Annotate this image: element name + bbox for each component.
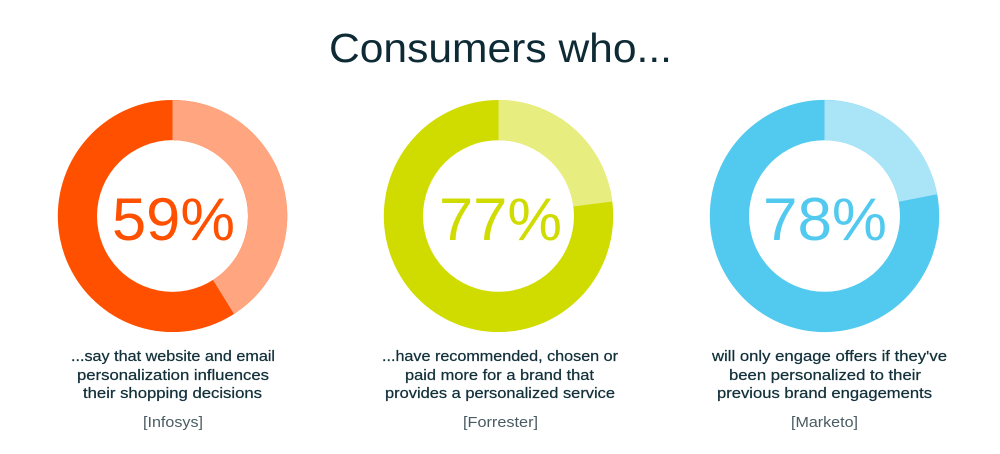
description: Forrester: provides a personalized service xyxy=(385,385,615,402)
description: Infosys xyxy=(71,348,275,402)
description: Infosys: personalization influences xyxy=(77,367,269,384)
panel: Forrester 77% xyxy=(382,100,618,431)
title: Consumers who... xyxy=(329,25,672,71)
source: Marketo: [Marketo] xyxy=(791,415,858,431)
panel: Marketo 78% xyxy=(710,100,947,431)
percentage: 77%: 77% xyxy=(439,186,562,253)
description: Forrester: paid more for a brand that xyxy=(405,367,595,384)
source: Forrester: [Forrester] xyxy=(463,415,538,431)
percentage: 59%: 59% xyxy=(112,186,235,253)
panel: Infosys 59% xyxy=(58,100,287,431)
donut chart: 77% xyxy=(384,100,613,332)
description: Marketo: will only engage offers if they've xyxy=(711,348,947,365)
source: Infosys: [Infosys] xyxy=(143,415,203,431)
donut chart: 59% xyxy=(58,100,287,332)
description: Forrester: ...have recommended, chosen or xyxy=(382,348,618,365)
donut chart: 78% xyxy=(710,100,939,332)
description: Infosys: ...say that website and email xyxy=(71,348,275,365)
percentage: 78%: 78% xyxy=(763,186,887,253)
description: Marketo: been personalized to their xyxy=(729,367,921,384)
description: Marketo xyxy=(711,348,947,402)
description: Forrester xyxy=(382,348,618,402)
description: Infosys: their shopping decisions xyxy=(83,385,262,402)
description: Marketo: previous brand engagements xyxy=(717,385,932,402)
